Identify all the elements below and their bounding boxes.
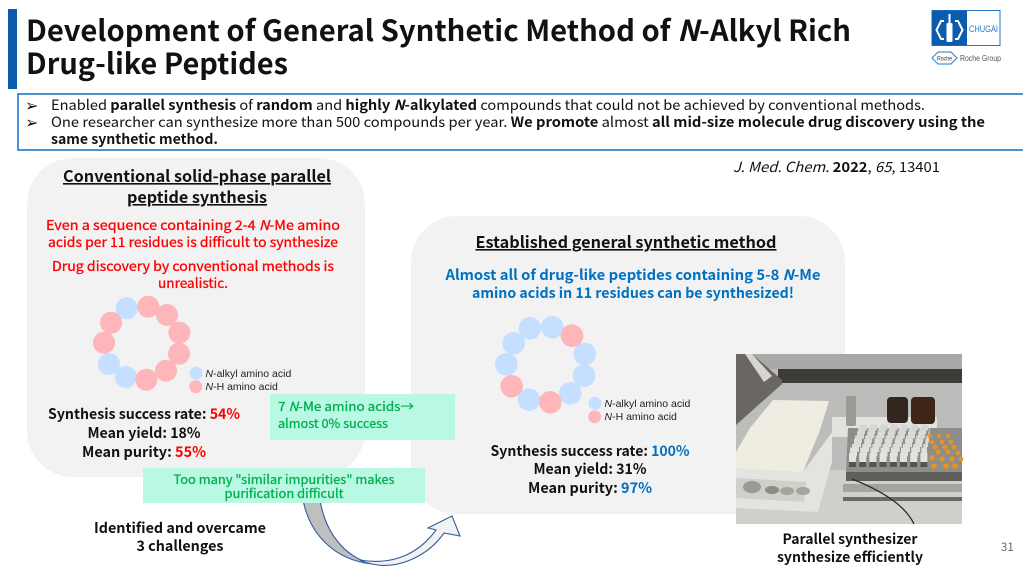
logo: Chugai and Roche Group: Roche bbox=[937, 56, 952, 62]
logo: Chugai and Roche Group: Roche Group bbox=[960, 53, 1001, 63]
panel heading: Established general synthetic method bbox=[476, 229, 776, 253]
legend: N-H amino acid bbox=[206, 381, 278, 393]
blue statement: amino acids in 11 residues can be synthesized! bbox=[472, 282, 794, 303]
results: Mean yield: 31% bbox=[534, 458, 647, 479]
results: Mean yield: 18% bbox=[88, 422, 201, 443]
red warning text: Drug discovery by conventional methods is bbox=[52, 255, 334, 275]
panel heading: peptide synthesis bbox=[127, 184, 267, 208]
red warning text bbox=[46, 214, 340, 292]
callout: 7 N-Me amino acids: 7 N-Me amino acids→ bbox=[278, 396, 415, 415]
results bbox=[48, 403, 240, 462]
caption: parallel synthesizer bbox=[777, 529, 923, 567]
bullet two: same synthetic method. bbox=[51, 129, 218, 149]
legend bbox=[189, 367, 291, 393]
citation: J. Med. Chem. 2022, 65, 13401 bbox=[733, 157, 940, 177]
title accent bar bbox=[8, 9, 17, 89]
caption: parallel synthesizer: synthesize efficiently bbox=[777, 547, 923, 567]
callout: similar impurities bbox=[143, 468, 425, 503]
caption: challenges: Identified and overcame bbox=[94, 517, 266, 538]
results: Mean purity: 97% bbox=[528, 477, 652, 498]
callout: 7 N-Me amino acids bbox=[270, 394, 455, 440]
title bbox=[26, 8, 851, 83]
curved arrow bbox=[303, 500, 460, 565]
results bbox=[490, 440, 690, 498]
blue statement bbox=[444, 264, 820, 303]
legend: N-alkyl amino acid bbox=[604, 398, 690, 410]
panel heading bbox=[63, 163, 331, 208]
title: Development of General Synthetic Method of N-Alkyl Rich bbox=[26, 8, 851, 50]
legend bbox=[588, 397, 690, 423]
red warning text: acids per 11 residues is difficult to synthesize bbox=[48, 231, 338, 251]
peptide ring diagram bbox=[93, 296, 190, 391]
callout: similar impurities: Too many "similar impurities" makes bbox=[174, 469, 395, 488]
blue statement: Almost all of drug-like peptides containing 5-8 N-Me bbox=[444, 264, 820, 285]
page number: 31 bbox=[1001, 539, 1014, 555]
panel heading: Conventional solid-phase parallel bbox=[63, 163, 331, 187]
legend: N-alkyl amino acid bbox=[206, 368, 291, 380]
results: Synthesis success rate: 54% bbox=[48, 403, 240, 424]
bullet one: Enabled parallel synthesis of random and highly N-alkylated compounds that could not be achieved by conventional methods. bbox=[51, 95, 925, 115]
results: Mean purity: 55% bbox=[82, 441, 206, 462]
panel: conventional synthesis bbox=[27, 158, 365, 477]
bullet two: One researcher can synthesize more than 500 compounds per year. We promote almost all mid-size molecule drug discovery using the bbox=[51, 112, 985, 132]
title: Drug-like Peptides bbox=[26, 41, 288, 83]
results: Synthesis success rate: 100% bbox=[490, 440, 690, 461]
bullet two bbox=[25, 112, 985, 149]
legend: N-H amino acid bbox=[604, 411, 677, 423]
photo: parallel synthesizer bbox=[736, 354, 963, 524]
summary box bbox=[18, 94, 1023, 150]
caption: challenges bbox=[94, 517, 266, 556]
caption: challenges: 3 challenges bbox=[136, 535, 224, 556]
callout: 7 N-Me amino acids: almost 0% success bbox=[278, 413, 388, 432]
panel: established method bbox=[411, 216, 845, 514]
bullet one: ➢ bbox=[25, 96, 38, 115]
red warning text: unrealistic. bbox=[158, 272, 228, 292]
red warning text: Even a sequence containing 2-4 N-Me amino bbox=[46, 214, 340, 234]
logo: Chugai and Roche Group: CHUGAI bbox=[969, 24, 998, 34]
callout: similar impurities: purification difficult bbox=[224, 483, 344, 502]
peptide ring diagram bbox=[495, 316, 596, 414]
caption: parallel synthesizer: Parallel synthesizer bbox=[782, 529, 918, 549]
logo: Chugai and Roche Group bbox=[932, 10, 1001, 64]
bullet two: ➢ bbox=[25, 113, 38, 132]
